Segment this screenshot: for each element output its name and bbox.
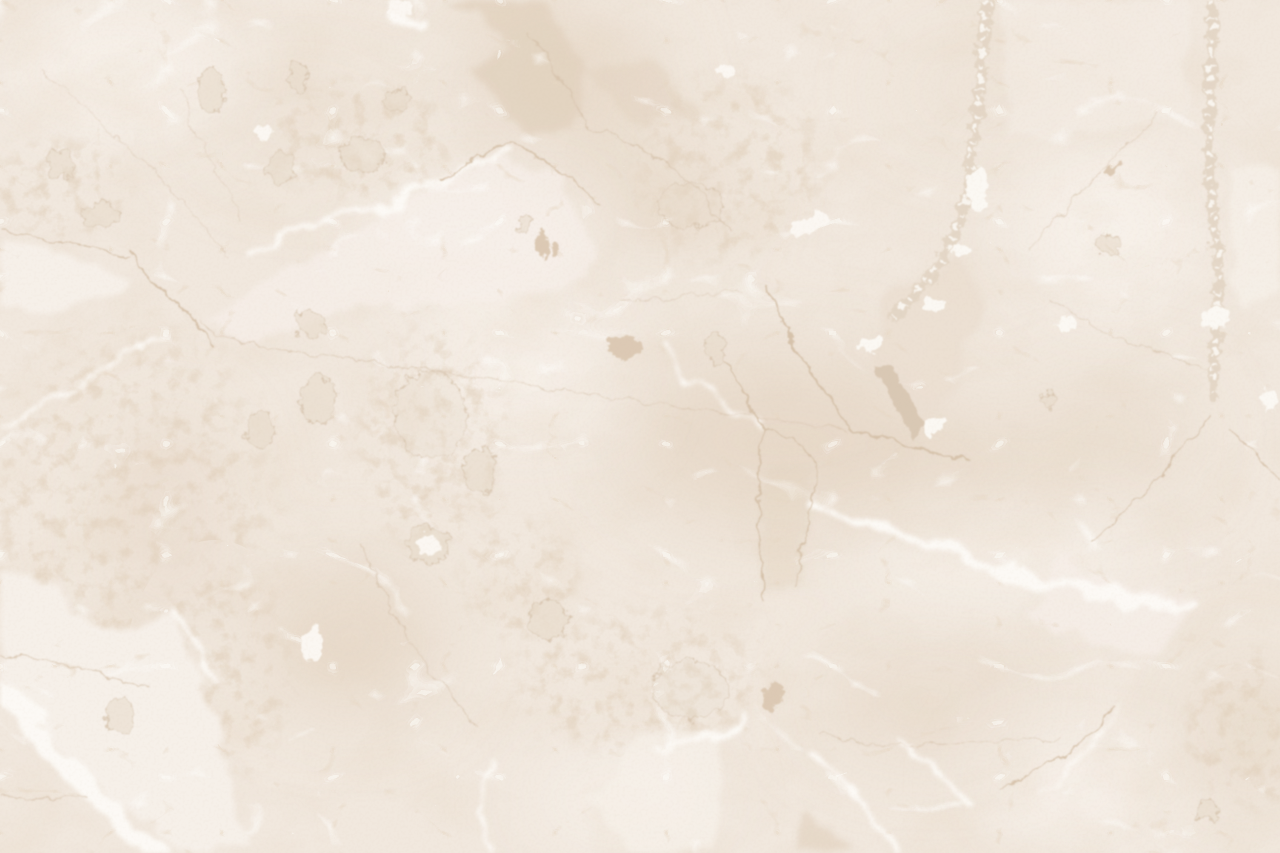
breccia veins top right [860,0,1279,438]
